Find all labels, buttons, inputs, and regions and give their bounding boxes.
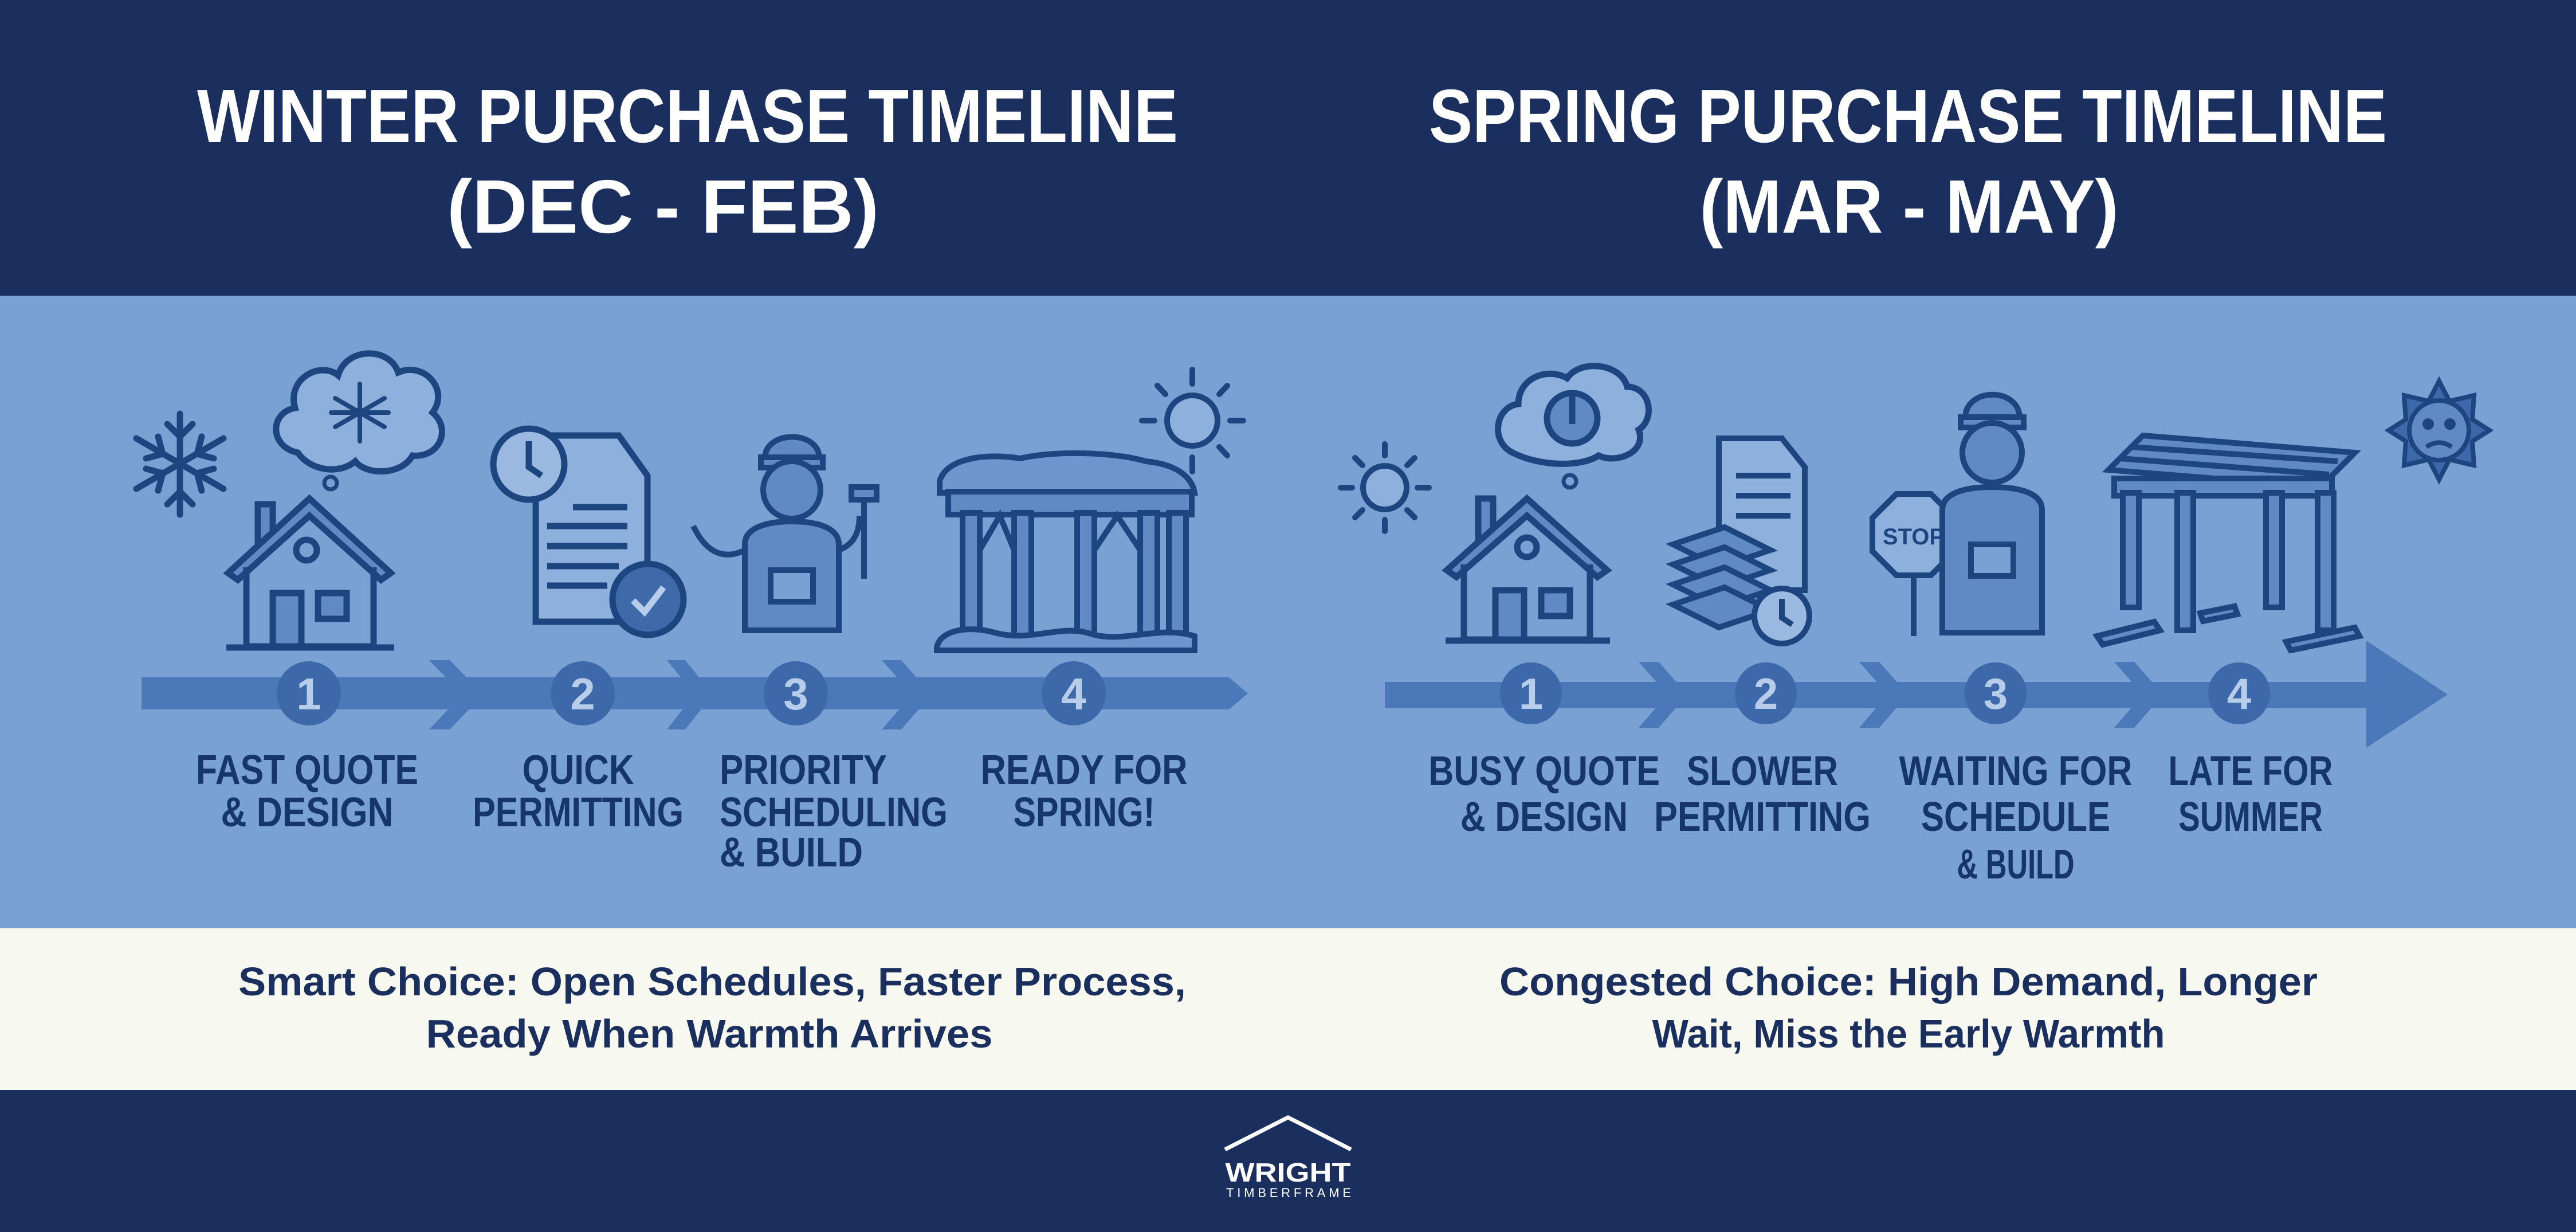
winter step labels: PERMITTING xyxy=(473,790,684,835)
spring arrow timeline xyxy=(1385,641,2448,748)
icon: house (spring) xyxy=(1446,499,1610,641)
spring step labels: SLOWER xyxy=(1687,748,1838,794)
spring step labels: WAITING FOR xyxy=(1899,748,2133,794)
winter arrow timeline: 4 xyxy=(1061,669,1086,719)
spring arrow timeline: 4 xyxy=(2227,670,2251,719)
icon: thought cloud (spring) xyxy=(1498,366,1648,488)
icon: permit document with clock and check xyxy=(493,429,684,635)
title: spring: (MAR - MAY) xyxy=(1699,164,2119,249)
icon: sad sun xyxy=(2389,381,2489,480)
callout: spring summary: Wait, Miss the Early Warmth xyxy=(1652,1011,2165,1056)
logo xyxy=(1225,1117,1351,1200)
title: winter xyxy=(197,74,1178,249)
winter step labels: & BUILD xyxy=(720,830,863,876)
callout: spring summary: Congested Choice: High Demand, Longer xyxy=(1499,959,2318,1004)
spring arrow timeline: 3 xyxy=(1984,670,2008,719)
icon: paper stack with clock xyxy=(1673,438,1809,644)
logo: TIMBERFRAME xyxy=(1226,1186,1351,1200)
bottom band xyxy=(0,1090,2576,1232)
logo: WRIGHT xyxy=(1225,1158,1351,1187)
spring step labels: & BUILD xyxy=(1957,842,2074,888)
cream band xyxy=(0,928,2576,1090)
icon: house (winter) xyxy=(226,499,394,648)
spring step labels: PERMITTING xyxy=(1654,794,1871,840)
spring step labels xyxy=(1428,748,2333,888)
chevrons xyxy=(1639,662,1687,728)
winter step labels: SPRING! xyxy=(1013,790,1155,835)
title: winter: (DEC - FEB) xyxy=(447,164,879,249)
spring step labels: LATE FOR xyxy=(2168,748,2333,794)
title: winter: WINTER PURCHASE TIMELINE xyxy=(197,74,1178,158)
step circles xyxy=(1500,662,2270,724)
icon: stop sign xyxy=(1872,494,1955,636)
winter step labels: SCHEDULING xyxy=(720,790,948,835)
step circles xyxy=(277,661,1106,725)
icon: snow-covered pergola xyxy=(937,453,1195,650)
winter step labels: & DESIGN xyxy=(221,790,393,835)
spring step labels: BUSY QUOTE xyxy=(1428,748,1660,794)
winter arrow timeline: 1 xyxy=(296,669,321,719)
winter arrow timeline: 3 xyxy=(783,669,808,719)
winter arrow timeline xyxy=(142,660,1248,729)
chevrons xyxy=(429,660,483,729)
winter step labels: QUICK xyxy=(523,747,634,793)
icon: sun (winter) xyxy=(1142,370,1243,472)
winter step labels: READY FOR xyxy=(981,747,1187,793)
spring step labels: SCHEDULE xyxy=(1921,794,2110,840)
winter step labels: FAST QUOTE xyxy=(196,747,418,793)
spring arrow timeline: 2 xyxy=(1754,670,1778,719)
icon: snowflake xyxy=(136,414,223,515)
spring arrow timeline: 1 xyxy=(1519,670,1543,719)
spring step labels: & DESIGN xyxy=(1460,794,1628,840)
middle band xyxy=(0,296,2576,928)
callout: winter summary xyxy=(238,959,1186,1056)
winter step labels xyxy=(196,747,1187,876)
icon: unfinished pergola xyxy=(2097,435,2359,650)
callout: spring summary xyxy=(1499,959,2318,1056)
callout: winter summary: Smart Choice: Open Schedules, Faster Process, xyxy=(238,959,1186,1004)
winter arrow timeline: 2 xyxy=(570,669,595,719)
icon: stop sign: STOP xyxy=(1883,524,1945,550)
callout: winter summary: Ready When Warmth Arrives xyxy=(426,1011,992,1056)
icon: thought cloud with snowflake xyxy=(276,354,442,489)
winter step labels: PRIORITY xyxy=(720,747,887,793)
title: spring: SPRING PURCHASE TIMELINE xyxy=(1429,74,2387,158)
icon: worker (spring) xyxy=(1942,395,2042,633)
icon: worker with hammer xyxy=(693,437,877,630)
icon: sun (spring) xyxy=(1341,444,1429,531)
spring step labels: SUMMER xyxy=(2178,794,2323,840)
title: spring xyxy=(1429,74,2387,249)
top band xyxy=(0,0,2576,296)
